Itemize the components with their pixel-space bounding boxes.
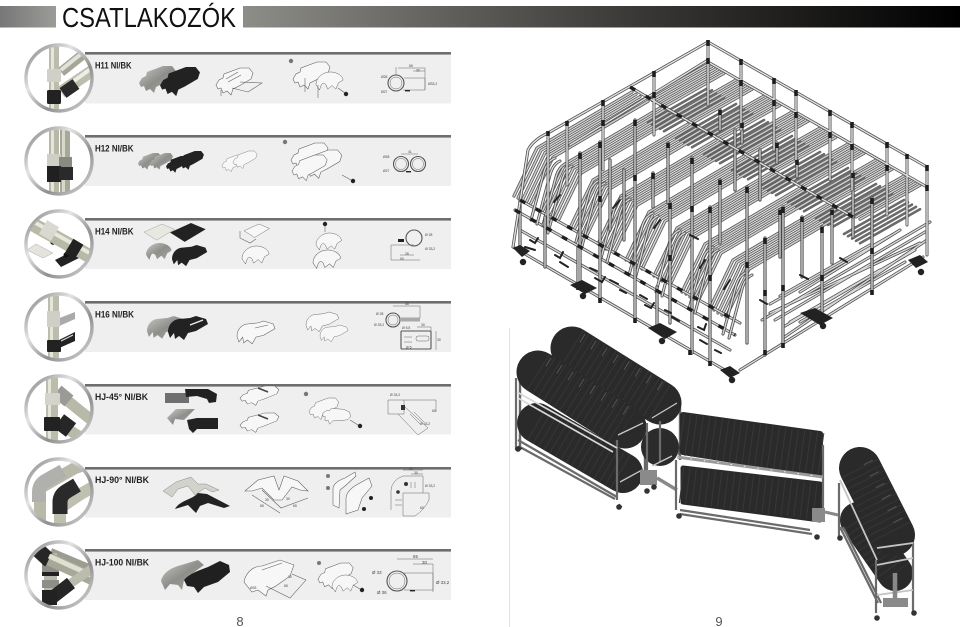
dimension drawing: 30 [409, 467, 413, 471]
dimension drawing: Ø28 [381, 75, 388, 79]
small dark brackets [525, 195, 847, 353]
line drawing: 30 [265, 498, 269, 502]
dimension drawing: 60 [432, 409, 436, 413]
divider [508, 328, 510, 627]
line drawing: 30 [288, 575, 292, 579]
label: H16 NI/BK [95, 308, 134, 320]
panel: H16 NI/BK [25, 293, 451, 361]
dimension drawing: 28 [405, 252, 409, 256]
rails [513, 200, 930, 373]
connector pair [139, 66, 200, 96]
label: H11 NI/BK [95, 60, 132, 70]
label: H12 NI/BK [95, 142, 134, 154]
label: HJ-90° NI/BK [95, 474, 149, 485]
dimension drawing: 50 [400, 257, 404, 261]
line drawing: 65 [293, 504, 297, 508]
tires upper back [572, 338, 670, 403]
dark beam joints [515, 87, 853, 335]
line drawing [244, 560, 306, 598]
tires lower [858, 520, 895, 573]
photo: HJ-45 [25, 375, 95, 447]
dimension drawing: Ø 33,2 [425, 247, 435, 251]
dimension drawing: 30 [421, 323, 425, 327]
line drawing [237, 321, 275, 344]
dark joints [548, 40, 927, 366]
dimension drawing: 30 [422, 560, 427, 565]
dimension drawing [381, 64, 437, 94]
isometric frame structure [513, 40, 930, 383]
dimension drawing [388, 393, 436, 435]
dimension drawing: Ø 33,2 [374, 323, 384, 327]
line drawing: Ø33 [250, 586, 257, 590]
panel: HJ-90° NI/BK [25, 458, 451, 526]
line drawing: 65 [260, 504, 264, 508]
line drawing [240, 224, 270, 264]
dimension drawing: Ø 33,2 [420, 422, 430, 426]
panel: HJ-45° NI/BK [25, 375, 451, 447]
photo: H12 [25, 127, 93, 195]
line drawing [245, 476, 308, 513]
line drawing [222, 151, 257, 172]
tires upper [860, 462, 902, 535]
header bar left [0, 6, 56, 28]
dimension drawing: Ø 33,2 [425, 484, 435, 488]
line drawing [216, 68, 262, 96]
lower inclined roller shelves [514, 92, 844, 317]
connector pair [147, 316, 208, 340]
dimension drawing: Ø33,2 [428, 82, 437, 86]
dimension drawing: 30 [414, 471, 418, 475]
dimension drawing: Ø 28 [425, 233, 432, 237]
dimension drawing [374, 302, 441, 350]
tires upper [681, 415, 822, 474]
tires lower back [641, 428, 679, 466]
lower deck rollers [648, 88, 920, 243]
dimension drawing: 30 [416, 68, 420, 72]
exploded view [313, 222, 342, 268]
connector pair [163, 477, 230, 513]
photo: H14 [25, 210, 93, 278]
header bar right [243, 6, 960, 28]
top frame [513, 42, 927, 255]
tire rack: right [837, 462, 917, 621]
panel: H14 NI/BK [25, 210, 451, 278]
label: H14 NI/BK [95, 226, 134, 236]
dimension drawing: Ø 33,2 [436, 580, 450, 585]
photo: H16 [25, 293, 93, 361]
tire rack: back [515, 338, 680, 510]
upper roller shelves [648, 64, 920, 219]
dimension drawing: Ø27 [383, 169, 390, 173]
dimension drawing: Ø 33 [372, 570, 382, 575]
dimension drawing: Ø 28 [376, 312, 383, 316]
dimension drawing: 41 [408, 150, 412, 154]
dimension drawing: Ø 36 [377, 590, 387, 595]
exploded view [326, 472, 373, 514]
panel: H12 NI/BK [25, 127, 451, 195]
exploded view [304, 392, 362, 431]
tires front lower [537, 423, 623, 473]
curved uprights [531, 158, 752, 338]
frame behind tires [520, 380, 680, 480]
tires front upper [538, 362, 635, 427]
dimension drawing: 66 [405, 302, 409, 306]
dimension drawing: 65 [413, 554, 418, 559]
dimension drawing: Ø 5,5 [402, 326, 410, 330]
rack frame [516, 378, 660, 500]
panel: HJ-100 NI/BK [25, 541, 451, 609]
photo: H11 [25, 44, 99, 112]
dimension drawing: 60 [420, 506, 424, 510]
title: CSATLAKOZÓK [62, 2, 237, 33]
dimension drawing [391, 230, 435, 261]
panel: H11 NI/BK [25, 44, 451, 112]
vertical posts [520, 110, 872, 363]
tires lower [681, 468, 822, 520]
exploded view [317, 561, 364, 592]
exploded view [283, 140, 355, 183]
dimension drawing: Ø 5 [406, 346, 412, 350]
rack frame [839, 483, 913, 613]
connector pair [161, 560, 230, 593]
dimension drawing: 65 [409, 64, 413, 68]
tire rack: middle [676, 415, 838, 540]
dimension drawing [383, 150, 426, 173]
rack frame [676, 445, 823, 534]
line drawing [240, 386, 279, 432]
dimension drawing: Ø28 [383, 155, 390, 159]
dimension drawing [391, 467, 435, 516]
connector set [165, 389, 218, 433]
connector pair [138, 151, 204, 173]
base plates [513, 245, 928, 383]
connector set [144, 223, 207, 266]
exploded view [306, 312, 348, 342]
dimension drawing [372, 554, 450, 595]
photo: HJ-90 [25, 458, 93, 526]
line drawing: 30 [286, 497, 290, 501]
photo: HJ-100 [25, 541, 97, 609]
dimension drawing: 30 [437, 338, 441, 342]
line drawing: 65 [284, 584, 288, 588]
label: HJ-45° NI/BK [95, 391, 148, 402]
dimension drawing: Ø27 [381, 90, 388, 94]
label: HJ-100 NI/BK [95, 556, 149, 568]
dimension drawing: Ø 33,2 [390, 393, 400, 397]
exploded view [289, 59, 348, 98]
